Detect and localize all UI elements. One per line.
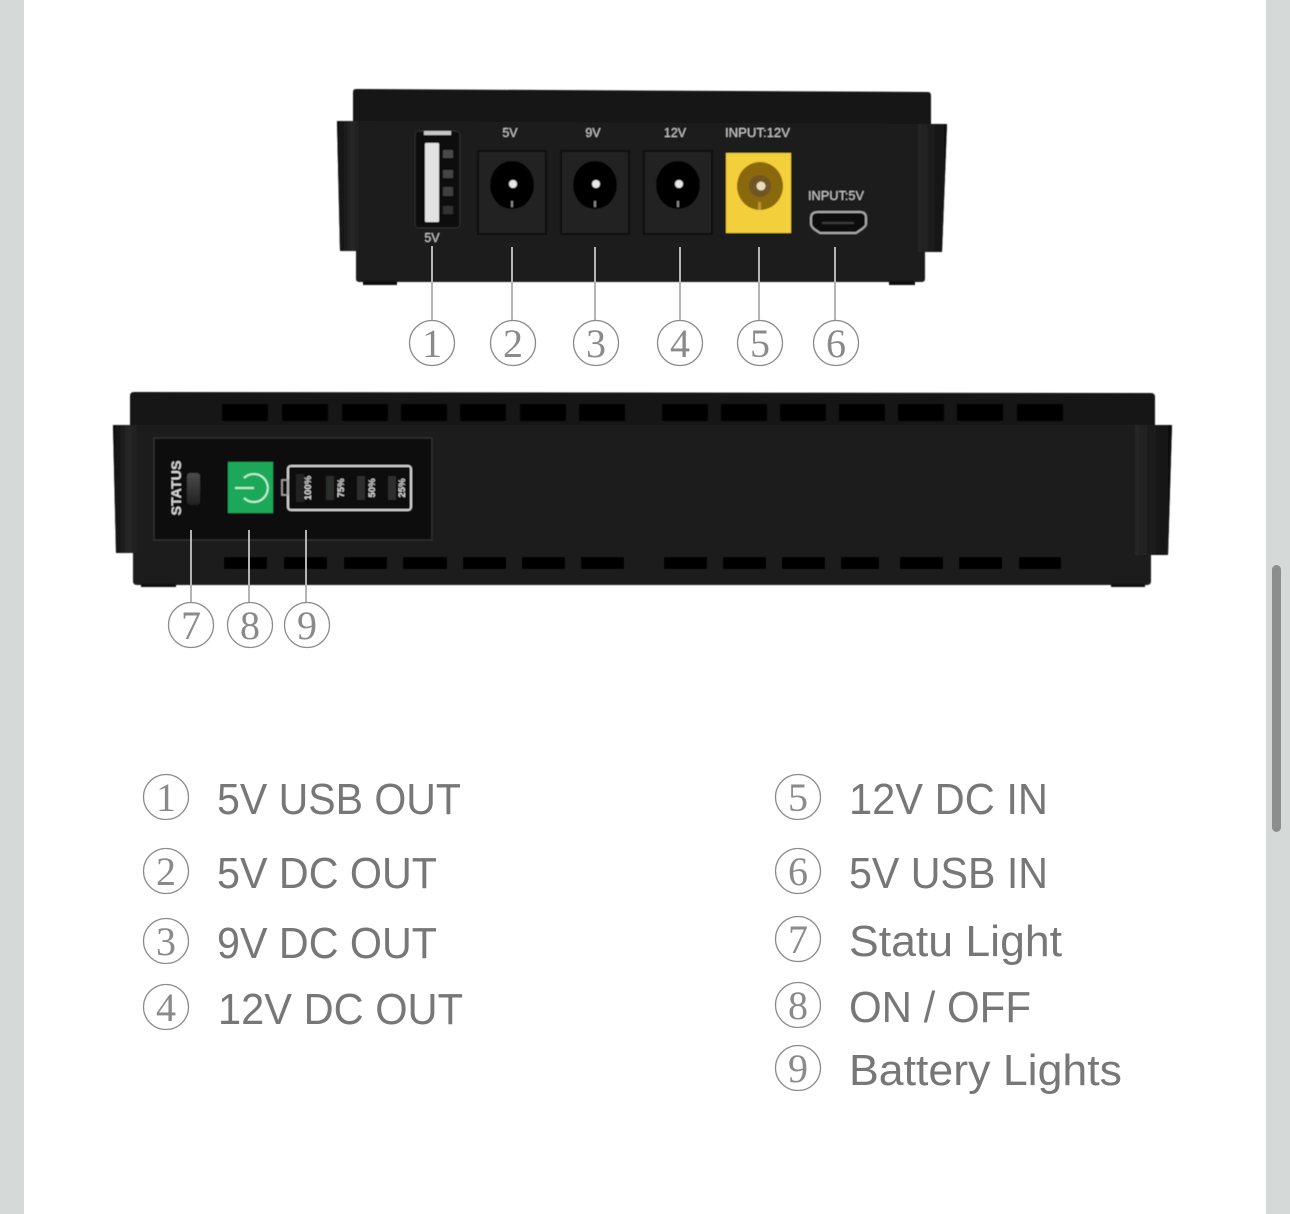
- bottom shell: [356, 250, 925, 282]
- callout: 3 9V out: 3: [586, 321, 606, 366]
- callout: 6 USB in: 6: [826, 321, 846, 366]
- callout: 9 battery: [284, 530, 330, 648]
- legend item 3: 9V DC OUT: [217, 919, 437, 968]
- legend item 1: 1: [156, 775, 176, 820]
- port: micro USB input: [811, 212, 866, 233]
- status label: STATUS: [169, 460, 184, 516]
- legend item 6: 6: [788, 849, 808, 894]
- page background strip: right: [1266, 0, 1290, 1214]
- legend item 7: 7: [788, 917, 808, 962]
- left side grip: [113, 425, 140, 553]
- right side grip: [918, 124, 947, 252]
- callout: 2 5V out: [490, 247, 536, 366]
- port label: input 12V: INPUT:12V: [725, 126, 791, 140]
- legend item 5: [776, 774, 1048, 824]
- battery indicator: 50%: [367, 478, 378, 498]
- page background strip: left: [0, 0, 24, 1214]
- control panel: [154, 438, 432, 540]
- legend item 9: Battery Lights: [849, 1046, 1122, 1095]
- device: end view with ports: [337, 89, 947, 285]
- port label: USB 5V: 5V: [424, 231, 440, 245]
- battery indicator: 100%: [303, 475, 314, 500]
- callout: 2 5V out: 2: [503, 321, 523, 366]
- legend item 7: Statu Light: [849, 917, 1062, 966]
- scrollbar thumb: [1272, 565, 1281, 832]
- legend item 5: 5: [788, 775, 808, 820]
- power button: [228, 462, 273, 513]
- status LED: [187, 473, 200, 505]
- port label: 12V: 12V: [664, 126, 687, 140]
- callout: 1 USB out: 1: [422, 321, 442, 366]
- legend item 2: 2: [156, 849, 176, 894]
- callout: 8 power: [228, 530, 272, 648]
- callout: 7 status: [168, 530, 214, 648]
- legend item 8: ON / OFF: [849, 983, 1031, 1032]
- device: long side view with controls: [113, 392, 1172, 587]
- middle band: [113, 425, 1172, 555]
- callout: 5 12V in: [738, 247, 782, 366]
- callout: 8 power: 8: [240, 603, 260, 648]
- callout: 4 12V out: 4: [670, 321, 690, 366]
- top shell: [130, 392, 1155, 428]
- legend: left column: [144, 774, 463, 1034]
- callout: 7 status: 7: [181, 603, 201, 648]
- battery indicator: 75%: [336, 478, 347, 498]
- legend item 4: 12V DC OUT: [218, 985, 463, 1034]
- port label: 5V: 5V: [502, 126, 518, 140]
- legend item 8: 8: [788, 983, 808, 1028]
- port: 9V DC jack: [561, 151, 629, 234]
- bottom shell: [133, 553, 1151, 585]
- legend: right column: [776, 774, 1122, 1095]
- callout: 6 USB in: [814, 247, 858, 366]
- legend item 5: 12V DC IN: [849, 775, 1048, 824]
- port label: 9V: 9V: [585, 126, 601, 140]
- callout: 1 USB out: [410, 246, 454, 366]
- foot left: [363, 281, 397, 285]
- callout: 5 12V in: 5: [750, 321, 770, 366]
- legend item 2: 5V DC OUT: [217, 849, 437, 898]
- legend item 6: 5V USB IN: [849, 849, 1048, 898]
- lower vents: [224, 557, 1061, 569]
- legend item 1: 5V USB OUT: [217, 775, 461, 824]
- top shell: [353, 89, 931, 124]
- legend item 3: 3: [156, 919, 176, 964]
- upper vents: [222, 404, 1063, 421]
- port label: input 5V: INPUT:5V: [808, 189, 865, 203]
- foot right: [889, 281, 915, 285]
- middle band: [337, 121, 947, 252]
- legend item 6: [776, 848, 1048, 898]
- battery indicator: [282, 466, 411, 510]
- port: 12V DC jack: [644, 151, 712, 234]
- right side grip: [1135, 425, 1172, 555]
- legend item 8: [776, 982, 1031, 1032]
- port: 5V DC jack: [478, 151, 546, 234]
- legend item 9: 9: [788, 1046, 808, 1091]
- callout: 3 9V out: [574, 247, 618, 366]
- foot right: [1111, 584, 1145, 587]
- foot left: [141, 584, 176, 587]
- port: USB A: [415, 131, 460, 228]
- left side grip: [337, 121, 362, 251]
- port: 12V DC input (yellow): [726, 153, 791, 233]
- callout: 9 battery: 9: [297, 603, 317, 648]
- battery indicator: 25%: [397, 478, 408, 498]
- legend item 4: 4: [156, 985, 176, 1030]
- callout: 4 12V out: [658, 247, 702, 366]
